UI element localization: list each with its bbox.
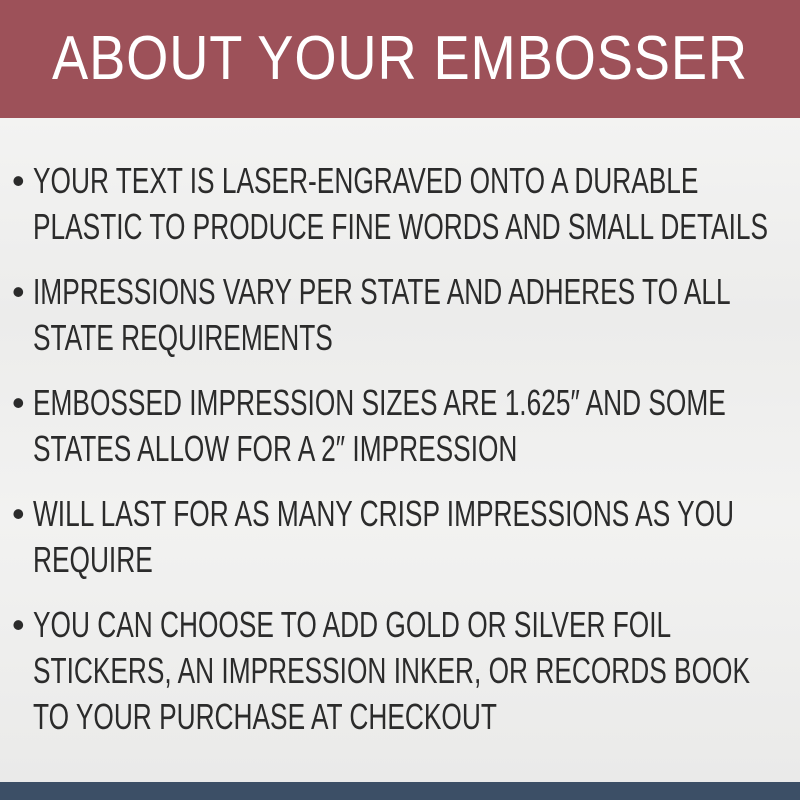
bullet 1: PLASTIC TO PRODUCE FINE WORDS AND SMALL DETAILS (33, 206, 768, 247)
footer band (0, 782, 800, 800)
bullet 4: WILL LAST FOR AS MANY CRISP IMPRESSIONS AS YOU (33, 493, 734, 534)
title: ABOUT YOUR EMBOSSER (52, 24, 748, 93)
bullet 1 (0, 158, 800, 250)
bullet 4: REQUIRE (33, 539, 153, 580)
bullet 4 (0, 491, 800, 583)
bullet list (13, 160, 768, 737)
bullet 2 (0, 269, 800, 361)
bullet 5: YOU CAN CHOOSE TO ADD GOLD OR SILVER FOIL (33, 604, 671, 645)
bullet 5: TO YOUR PURCHASE AT CHECKOUT (33, 696, 497, 737)
bullet 1: YOUR TEXT IS LASER-ENGRAVED ONTO A DURABLE (33, 160, 698, 201)
title (0, 0, 800, 118)
bullet 2: IMPRESSIONS VARY PER STATE AND ADHERES TO ALL (33, 271, 731, 312)
bullet 2: STATE REQUIREMENTS (33, 317, 333, 358)
bullet 5: STICKERS, AN IMPRESSION INKER, OR RECORDS BOOK (33, 650, 750, 691)
bullet 3 (0, 380, 800, 472)
bullet 3: EMBOSSED IMPRESSION SIZES ARE 1.625″ AND SOME (33, 382, 726, 423)
bullet 3: STATES ALLOW FOR A 2″ IMPRESSION (33, 428, 517, 469)
bullet 5 (0, 602, 800, 740)
